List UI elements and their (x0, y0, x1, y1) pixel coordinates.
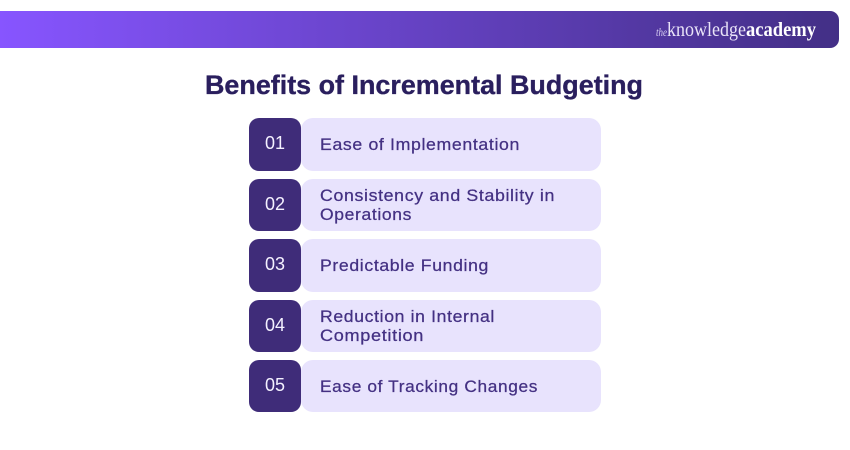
item 02: 02 (265, 194, 285, 214)
item 02: Consistency and Stability in (320, 187, 555, 205)
title: Benefits of Incremental Budgeting (205, 70, 643, 100)
item 05: Ease of Tracking Changes (320, 378, 538, 396)
logo: the knowledge academy (656, 20, 816, 41)
item 05: 05 (265, 375, 285, 395)
item 01: Ease of Implementation (320, 136, 520, 154)
item 03: 03 (265, 254, 285, 274)
item 02: Operations (320, 206, 412, 224)
item 03: Predictable Funding (320, 257, 489, 275)
item 01: 01 (265, 133, 285, 153)
item 02 (249, 179, 601, 231)
item 04 (249, 300, 601, 352)
item 04: Reduction in Internal (320, 308, 495, 326)
logo: the knowledge academy: knowledge (667, 20, 746, 41)
logo: the knowledge academy: the (656, 25, 667, 39)
item 04: Competition (320, 327, 424, 345)
item 05 (249, 360, 601, 412)
header banner (0, 11, 839, 48)
item 01 (249, 118, 601, 171)
item 04: 04 (265, 315, 285, 335)
item 03 (249, 239, 601, 292)
logo: the knowledge academy: academy (746, 20, 816, 41)
